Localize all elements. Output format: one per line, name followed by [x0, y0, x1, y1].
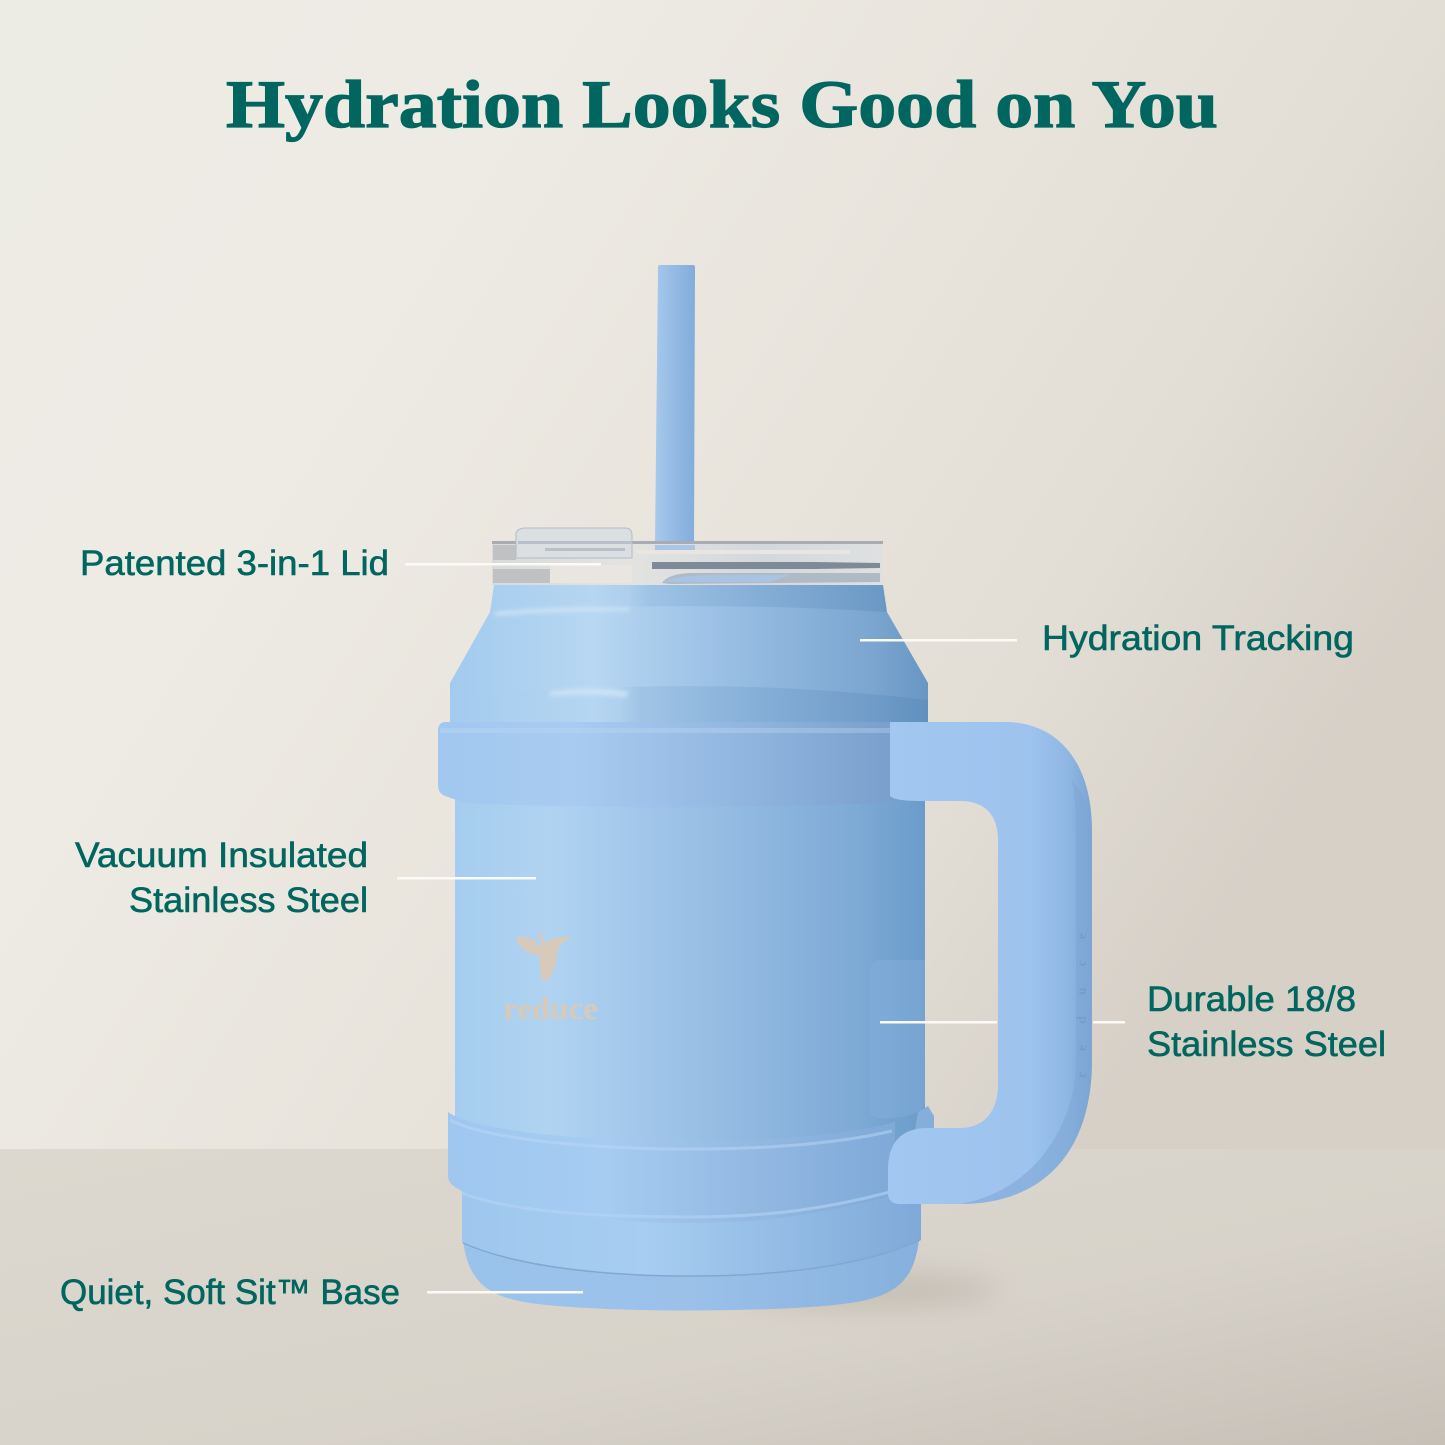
- handle outer shaded edge: [960, 780, 1092, 1204]
- lid light highlight: [550, 550, 850, 583]
- leader line: lid: [405, 563, 601, 566]
- shoulder lower shade: [450, 686, 928, 724]
- lid top edge: [492, 541, 883, 544]
- insulated mug: [438, 265, 1092, 1310]
- shoulder neck shade: [490, 585, 887, 612]
- base seam: [463, 1240, 920, 1276]
- handle embossed brand: reduce: [1075, 933, 1090, 1078]
- handle: [888, 722, 1092, 1204]
- label: durable steel: [1147, 980, 1386, 1064]
- upper band highlight: [440, 728, 892, 733]
- shoulder: [450, 585, 928, 724]
- lid lower detail: [662, 573, 880, 584]
- lower band: [448, 1112, 895, 1223]
- shoulder highlights: [495, 608, 630, 697]
- lower band lip: [462, 1192, 890, 1217]
- logo wordmark: reduce: [503, 990, 598, 1026]
- lid tab stripes: [518, 541, 632, 551]
- brand logo: [503, 930, 598, 1026]
- main body: [455, 780, 925, 1160]
- lid blue reflection: [665, 575, 790, 582]
- label: vacuum insulated: Stainless Steel: [129, 881, 368, 920]
- label: durable steel: Stainless Steel: [1147, 1025, 1386, 1064]
- lower band highlight: [450, 1120, 892, 1149]
- label: lid: Patented 3-in-1 Lid: [80, 544, 389, 583]
- title: Hydration Looks Good on You: [226, 66, 1218, 142]
- lid left shading: [493, 545, 550, 583]
- mug base: [463, 1240, 919, 1310]
- lid dark detail: [652, 562, 880, 569]
- body side panel: [870, 960, 925, 1119]
- leader line: hydration tracking: [860, 639, 1017, 642]
- leader line: durable steel outer: [1093, 1021, 1125, 1024]
- leader line: durable steel inner: [880, 1021, 997, 1024]
- label: hydration tracking: Hydration Tracking: [1042, 619, 1354, 658]
- label: base: Quiet, Soft Sit™ Base: [60, 1273, 400, 1312]
- small tab behind handle joint: [915, 1106, 934, 1130]
- mug shadow: [740, 1272, 1000, 1308]
- logo mark: [516, 930, 573, 982]
- label: vacuum insulated: Vacuum Insulated: [75, 836, 368, 875]
- background floor: [0, 1149, 1445, 1445]
- lid flip tab: [516, 528, 632, 558]
- lid: [492, 528, 883, 585]
- label: durable steel: Durable 18/8: [1147, 980, 1356, 1019]
- straw: [655, 265, 695, 545]
- lower body: [462, 1185, 921, 1276]
- leader line: base: [427, 1291, 583, 1294]
- leader line: vacuum insulated: [397, 877, 536, 880]
- lid rim: [492, 543, 883, 585]
- background wall: [0, 0, 1445, 1149]
- straw seen through lid: [655, 545, 695, 553]
- upper band: [438, 722, 892, 807]
- label: vacuum insulated: [75, 836, 368, 920]
